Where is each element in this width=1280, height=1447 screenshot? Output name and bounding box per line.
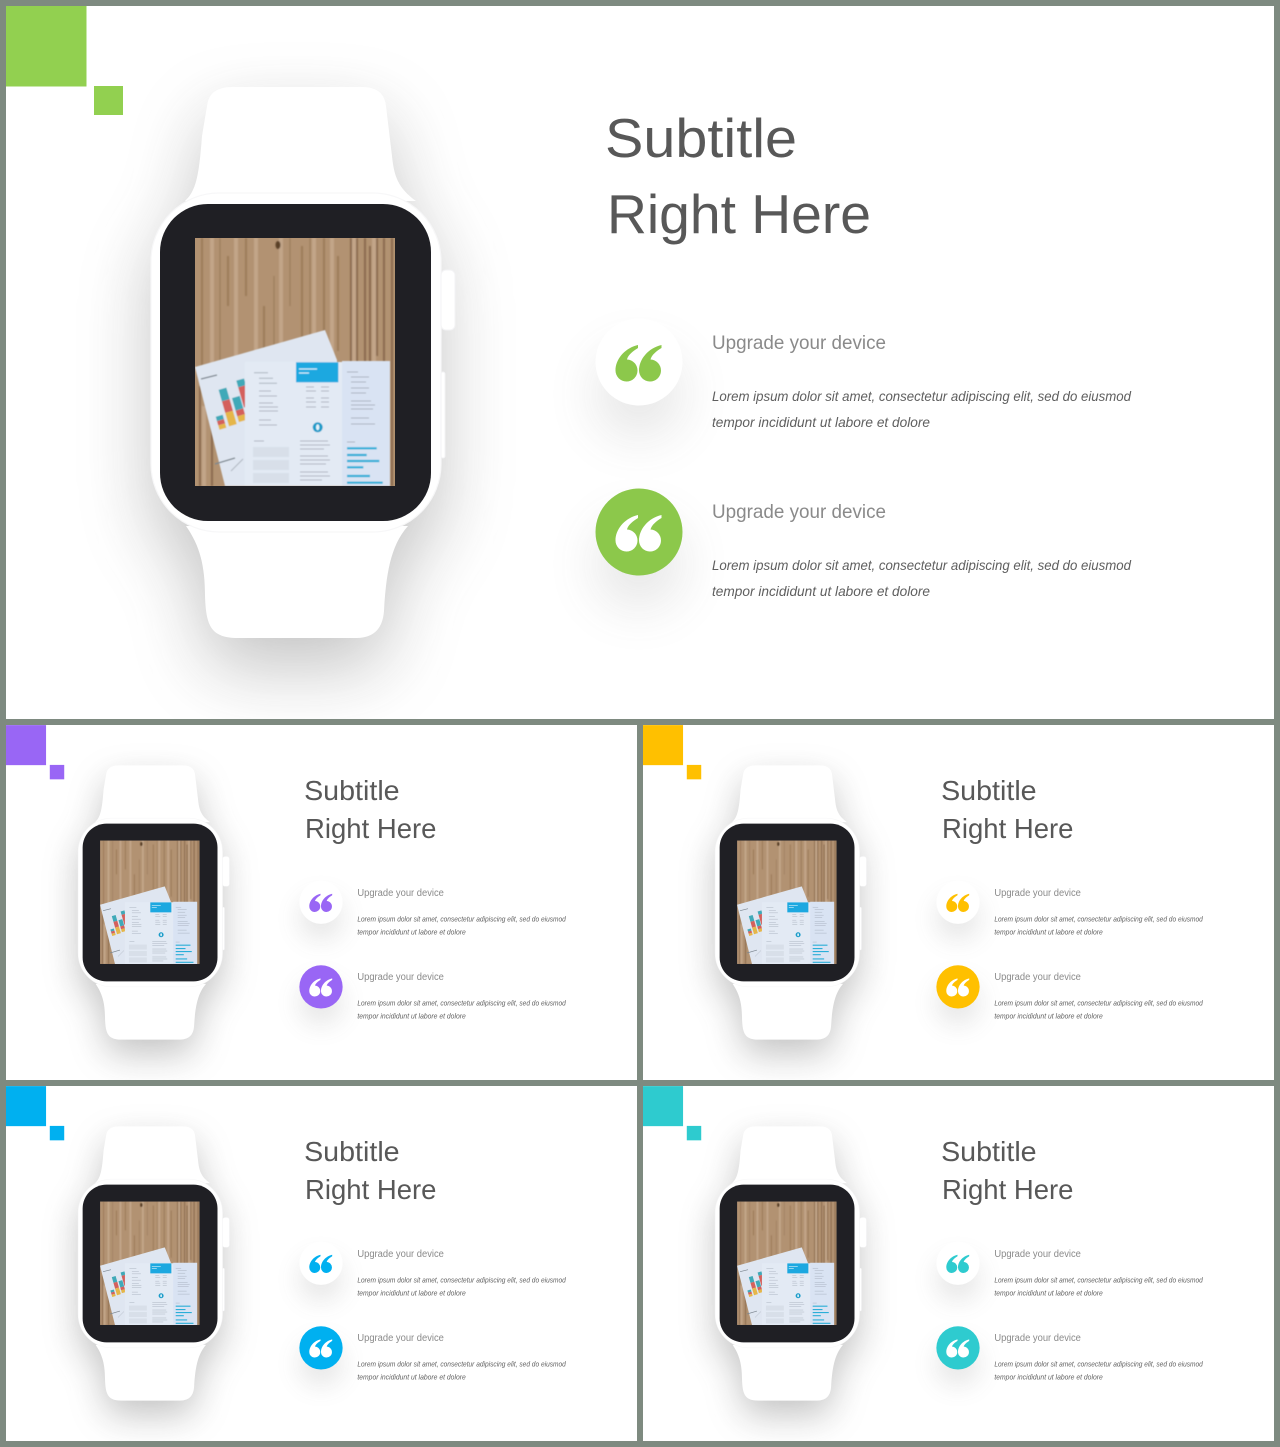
- text block: second quote: tempor incididunt ut labore et dolore: [994, 1014, 1103, 1021]
- text block: second quote: Upgrade your device: [357, 972, 444, 983]
- icon: quote badge filled: [596, 488, 682, 607]
- text block: first quote: Upgrade your device: [994, 1249, 1081, 1260]
- corner squares: [643, 1086, 701, 1140]
- text block: first quote: tempor incididunt ut labore et dolore: [712, 414, 930, 430]
- title: Subtitle: [605, 107, 797, 169]
- text block: first quote: Upgrade your device: [994, 888, 1081, 899]
- text block: second quote: Lorem ipsum dolor sit amet, consectetur adipiscing elit, sed do eiusmod: [357, 1362, 567, 1369]
- text block: second quote: Upgrade your device: [357, 1333, 444, 1344]
- text block: first quote: Upgrade your device: [712, 332, 886, 354]
- title: Subtitle: [304, 775, 400, 806]
- text block: second quote: [357, 972, 567, 1021]
- icon: quote badge filled: [299, 965, 343, 1024]
- icon: smartwatch mockup: [715, 1126, 866, 1416]
- icon: quote badge filled: [936, 965, 980, 1024]
- text block: first quote: Lorem ipsum dolor sit amet, consectetur adipiscing elit, sed do eiusmod: [712, 388, 1132, 404]
- corner squares: [6, 725, 64, 779]
- panel: yellow slide: [643, 725, 1274, 1080]
- title: Right Here: [305, 1174, 436, 1205]
- text block: second quote: Lorem ipsum dolor sit amet, consectetur adipiscing elit, sed do eiusmod: [357, 1001, 567, 1008]
- text block: second quote: [712, 501, 1132, 599]
- text block: second quote: tempor incididunt ut labore et dolore: [357, 1375, 466, 1382]
- panel: purple slide: [6, 725, 637, 1080]
- text block: first quote: tempor incididunt ut labore et dolore: [357, 1291, 466, 1298]
- title: [941, 775, 1073, 844]
- panel: teal slide: [643, 1086, 1274, 1441]
- icon: quote badge white: [596, 318, 682, 437]
- text block: first quote: Upgrade your device: [357, 888, 444, 899]
- text block: first quote: tempor incididunt ut labore et dolore: [357, 930, 466, 937]
- title: Right Here: [305, 813, 436, 844]
- text block: first quote: [357, 1249, 567, 1298]
- corner squares: [6, 1086, 64, 1140]
- text block: second quote: [994, 1333, 1204, 1382]
- text block: second quote: Lorem ipsum dolor sit amet, consectetur adipiscing elit, sed do eiusmod: [994, 1001, 1204, 1008]
- text block: first quote: tempor incididunt ut labore et dolore: [994, 930, 1103, 937]
- text block: second quote: Upgrade your device: [994, 1333, 1081, 1344]
- icon: smartwatch mockup: [78, 1126, 229, 1416]
- icon: quote badge white: [299, 881, 343, 940]
- icon: smartwatch mockup: [151, 87, 455, 668]
- title: Right Here: [607, 183, 871, 245]
- title: Right Here: [942, 1174, 1073, 1205]
- title: [304, 1136, 436, 1205]
- icon: smartwatch mockup: [715, 765, 866, 1055]
- text block: first quote: Lorem ipsum dolor sit amet, consectetur adipiscing elit, sed do eiusmod: [994, 917, 1204, 924]
- text block: first quote: tempor incididunt ut labore et dolore: [994, 1291, 1103, 1298]
- title: [304, 775, 436, 844]
- text block: second quote: Upgrade your device: [994, 972, 1081, 983]
- panel: main slide (green): [6, 6, 1274, 719]
- text block: second quote: Upgrade your device: [712, 501, 886, 523]
- text block: second quote: Lorem ipsum dolor sit amet, consectetur adipiscing elit, sed do eiusmod: [712, 557, 1132, 573]
- text block: second quote: tempor incididunt ut labore et dolore: [712, 583, 930, 599]
- text block: first quote: [994, 888, 1204, 937]
- title: [605, 107, 871, 245]
- icon: quote badge white: [299, 1242, 343, 1301]
- title: Subtitle: [941, 1136, 1037, 1167]
- text block: first quote: [712, 332, 1132, 430]
- text block: second quote: tempor incididunt ut labore et dolore: [994, 1375, 1103, 1382]
- text block: second quote: tempor incididunt ut labore et dolore: [357, 1014, 466, 1021]
- text block: first quote: Lorem ipsum dolor sit amet, consectetur adipiscing elit, sed do eiusmod: [357, 1278, 567, 1285]
- title: Subtitle: [304, 1136, 400, 1167]
- corner squares: [643, 725, 701, 779]
- corner squares: [6, 6, 123, 115]
- text block: first quote: Lorem ipsum dolor sit amet, consectetur adipiscing elit, sed do eiusmod: [357, 917, 567, 924]
- text block: second quote: Lorem ipsum dolor sit amet, consectetur adipiscing elit, sed do eiusmod: [994, 1362, 1204, 1369]
- icon: quote badge white: [936, 1242, 980, 1301]
- text block: first quote: [994, 1249, 1204, 1298]
- title: Subtitle: [941, 775, 1037, 806]
- text block: first quote: [357, 888, 567, 937]
- icon: quote badge filled: [299, 1326, 343, 1385]
- title: [941, 1136, 1073, 1205]
- text block: first quote: Upgrade your device: [357, 1249, 444, 1260]
- icon: quote badge white: [936, 881, 980, 940]
- icon: quote badge filled: [936, 1326, 980, 1385]
- panel: blue slide: [6, 1086, 637, 1441]
- title: Right Here: [942, 813, 1073, 844]
- icon: smartwatch mockup: [78, 765, 229, 1055]
- text block: first quote: Lorem ipsum dolor sit amet, consectetur adipiscing elit, sed do eiusmod: [994, 1278, 1204, 1285]
- text block: second quote: [994, 972, 1204, 1021]
- text block: second quote: [357, 1333, 567, 1382]
